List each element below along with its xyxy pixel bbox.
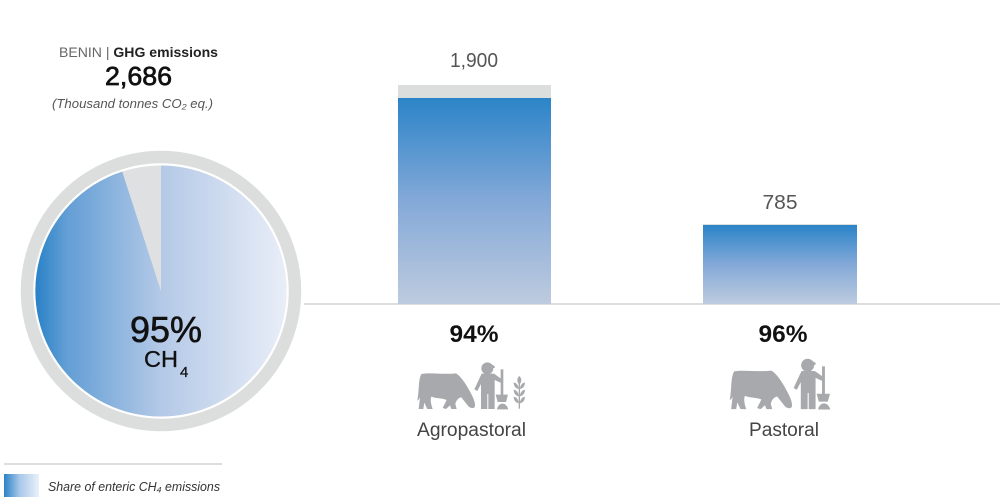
bar: Agropastoral xyxy=(398,50,551,304)
pie chart: 95% CH4 share: 4 xyxy=(180,364,188,381)
pie chart: 95% CH4 share xyxy=(27,157,295,425)
bar: Agropastoral: 1,900 xyxy=(450,50,498,72)
heading: Benin GHG emissions xyxy=(52,44,218,111)
label: Agropastoral: Agropastoral xyxy=(417,420,526,441)
label: Pastoral: Pastoral xyxy=(749,420,819,441)
bar: Pastoral xyxy=(703,192,857,304)
legend: share of enteric CH4 emissions: Share of enteric CH₄ emissions xyxy=(48,479,220,494)
share label: Agropastoral 94%: 94% xyxy=(450,321,498,348)
bar: Pastoral: 785 xyxy=(762,192,798,214)
icon: cow and farmer xyxy=(730,359,830,410)
heading: Benin GHG emissions: BENIN | GHG emissions xyxy=(59,44,218,60)
heading: Benin GHG emissions: 2,686 xyxy=(105,61,172,91)
share label: Pastoral 96%: 96% xyxy=(758,321,808,348)
heading: Benin GHG emissions: (Thousand tonnes CO₂ eq.) xyxy=(52,96,213,111)
legend: share of enteric CH4 emissions xyxy=(4,463,222,497)
pie chart: 95% CH4 share: CH xyxy=(144,346,178,372)
axis baseline xyxy=(304,303,1000,305)
icon: cow, farmer and wheat xyxy=(417,362,525,409)
pie chart: 95% CH4 share: 95% xyxy=(130,309,202,350)
